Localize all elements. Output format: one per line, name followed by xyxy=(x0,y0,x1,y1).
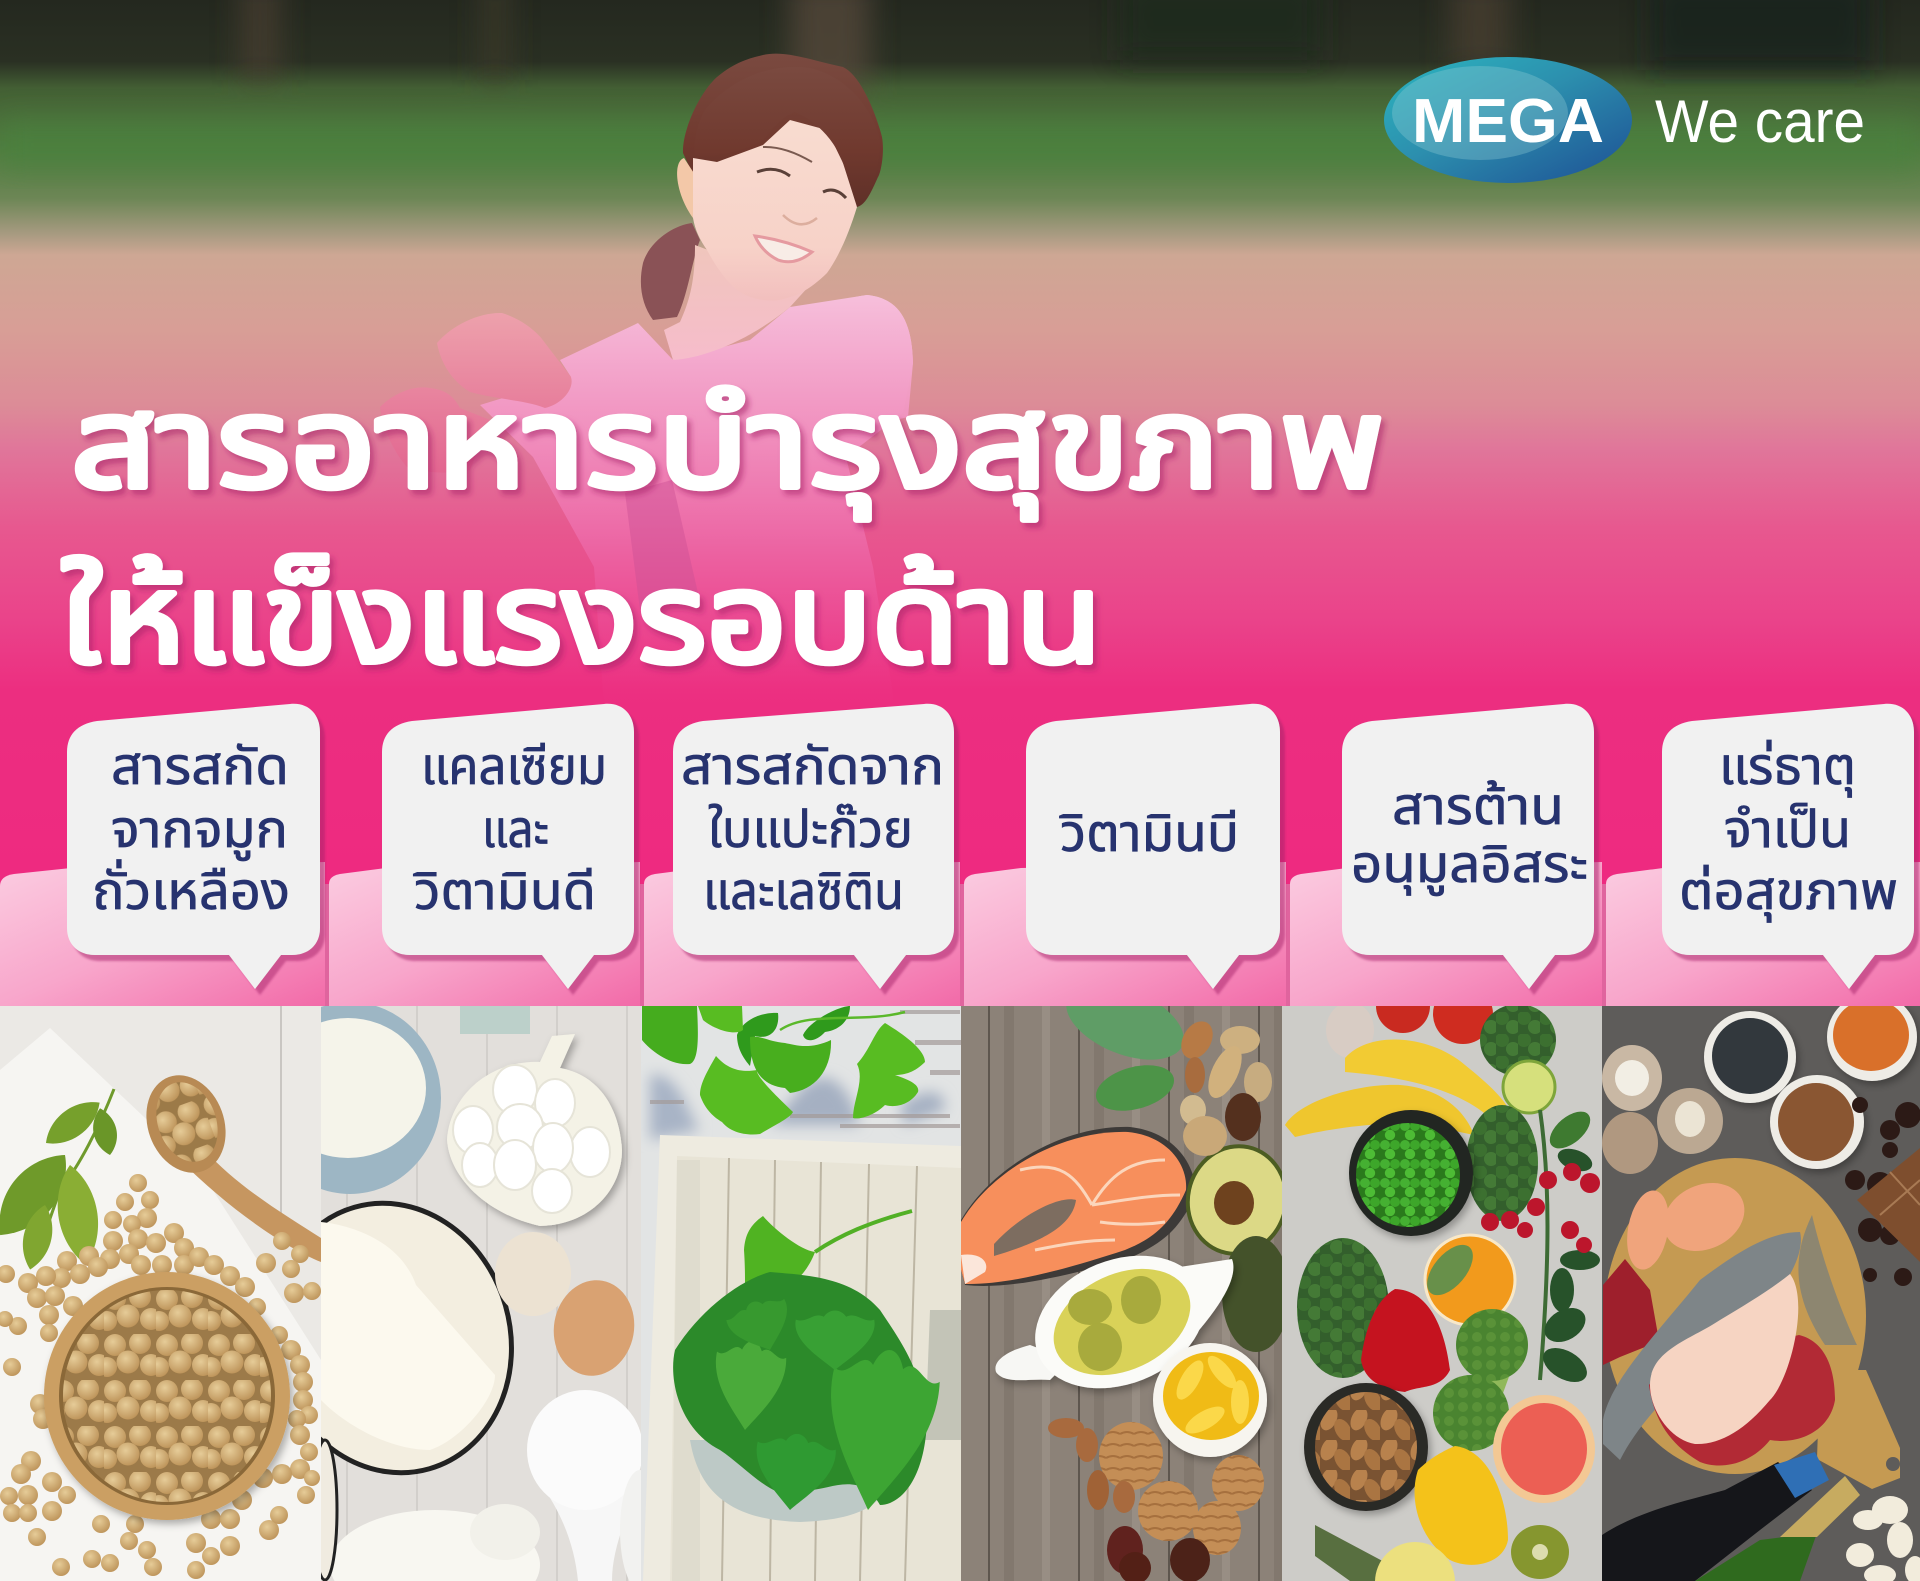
logo wordmark: MEGA xyxy=(1412,87,1604,156)
bubble: essential minerals xyxy=(1662,704,1914,989)
fish xyxy=(1603,1215,1857,1460)
chocolate xyxy=(1857,1148,1920,1262)
bubble: soy germ extract xyxy=(67,704,320,989)
spoon xyxy=(146,1075,321,1262)
bubble: soy germ extract: จากจมูก xyxy=(111,801,288,861)
bubble: antioxidants: สารต้าน xyxy=(1392,778,1564,836)
title xyxy=(61,373,1384,689)
ponytail xyxy=(641,223,700,320)
walnuts and almonds xyxy=(1048,1418,1264,1581)
kale top xyxy=(1480,1004,1556,1076)
cutting board xyxy=(1604,1158,1900,1489)
ear xyxy=(677,158,705,218)
photo panel: soybeans xyxy=(0,1006,321,1581)
bubble: calcium and vitamin D: และ xyxy=(482,801,549,859)
bubble: essential minerals: จำเป็น xyxy=(1724,801,1851,859)
logo: MEGA We care xyxy=(1384,57,1865,183)
white spoon and yogurt bowl xyxy=(313,1390,660,1581)
yellow pepper xyxy=(1415,1446,1508,1565)
bubble: essential minerals: แร่ธาตุ xyxy=(1719,738,1856,798)
title: สารอาหารบำรุงสุขภาพ xyxy=(71,373,1384,520)
lime xyxy=(1503,1061,1555,1113)
bananas xyxy=(1285,1040,1510,1137)
hero background: blurred park fading to pink xyxy=(0,0,1920,880)
bubble: calcium and vitamin D: วิตามินดี xyxy=(413,863,596,921)
weathered board with shadows xyxy=(650,1075,945,1140)
bubble: ginkgo leaf extract and lecithin: สารสกัดจาก xyxy=(681,738,944,796)
chicken breast xyxy=(1650,1274,1798,1444)
torso and shirt xyxy=(480,295,913,720)
eggs xyxy=(495,1232,642,1382)
fist near xyxy=(437,313,572,408)
bowl of ginkgo leaves xyxy=(673,1272,944,1522)
logo oval xyxy=(1384,57,1632,183)
bubble: vitamin B xyxy=(1026,704,1280,989)
scattered beans xyxy=(0,1174,321,1579)
oil boat xyxy=(995,1256,1238,1396)
bubble: ginkgo leaf extract and lecithin: ใบแปะก๊วย xyxy=(708,801,913,859)
bubble: antioxidants xyxy=(1342,704,1594,989)
top-right nuts xyxy=(1175,1016,1272,1156)
capsule bowl xyxy=(1153,1343,1267,1457)
almond bowl xyxy=(1304,1383,1428,1511)
photo panel: ginkgo leaves xyxy=(641,1006,961,1581)
herbs and berries xyxy=(1466,1105,1600,1389)
wine bottles xyxy=(1602,1452,1860,1581)
red meat block xyxy=(1603,1259,1658,1365)
wooden tray xyxy=(643,1135,961,1581)
red pepper xyxy=(1361,1289,1450,1392)
ginkgo leaves on top xyxy=(642,1006,925,1134)
photo panel: minerals, meat and seafood xyxy=(1602,993,1920,1581)
white cloth xyxy=(0,1028,321,1581)
avocado xyxy=(1186,1144,1282,1352)
photo panel: salmon, oil, nuts xyxy=(961,969,1296,1581)
tagline: We care xyxy=(1655,88,1865,155)
black rim dish with cheese xyxy=(321,1200,514,1476)
bubble: soy germ extract: สารสกัด xyxy=(111,738,289,796)
hair xyxy=(683,54,883,207)
salmon steak xyxy=(961,1127,1196,1286)
bubble: antioxidants: อนุมูลอิสระ xyxy=(1351,836,1588,896)
broccoli xyxy=(1433,1309,1528,1451)
seed and spice bowls xyxy=(1704,993,1917,1169)
fringe xyxy=(694,67,880,207)
shrimp xyxy=(1621,1170,1756,1273)
wooden bowl of soybeans xyxy=(44,1272,290,1520)
face xyxy=(693,120,857,301)
neck xyxy=(664,245,810,360)
light pink footer bands behind bubbles xyxy=(0,862,1920,1006)
facial features xyxy=(755,147,846,262)
bubble: calcium and vitamin D: แคลเซียม xyxy=(421,738,607,796)
white dish with mozzarella xyxy=(447,1034,622,1226)
orange xyxy=(1418,1235,1515,1325)
right upper arm sleeve xyxy=(571,295,913,443)
bubble: ginkgo leaf extract and lecithin: และเลซิติน xyxy=(703,863,904,921)
bubble: vitamin B: วิตามินบี xyxy=(1059,805,1239,863)
cottage cheese bowl xyxy=(321,1006,441,1194)
woman stretching, fading into the pink xyxy=(380,54,913,720)
mushrooms xyxy=(1602,1045,1723,1174)
leggings shade xyxy=(625,480,698,610)
soybean leaves xyxy=(0,1089,121,1273)
bubble: calcium and vitamin D xyxy=(382,704,634,989)
peas bowl xyxy=(1349,1110,1473,1236)
title: ให้แข็งแรงรอบด้าน xyxy=(61,548,1102,689)
dried fruit xyxy=(1845,1097,1920,1286)
grapefruit xyxy=(1493,1395,1595,1503)
bubble: ginkgo leaf extract and lecithin xyxy=(673,704,954,989)
photo panel: fruits and vegetables xyxy=(1282,979,1602,1581)
asparagus, lemon, kiwi xyxy=(1315,1525,1569,1581)
single leaf with stem xyxy=(744,1211,912,1285)
garlic and tomatoes xyxy=(1326,1006,1493,1058)
bubble: essential minerals: ต่อสุขภาพ xyxy=(1679,863,1898,923)
fist far xyxy=(380,387,490,473)
beef xyxy=(1649,1335,1835,1466)
basil leaves xyxy=(1066,1006,1184,1111)
photo panel: dairy and eggs xyxy=(321,1006,641,1581)
bubble: soy germ extract: ถั่วเหลือง xyxy=(92,859,290,921)
white beans xyxy=(1846,1496,1920,1581)
kale xyxy=(1297,1238,1389,1378)
